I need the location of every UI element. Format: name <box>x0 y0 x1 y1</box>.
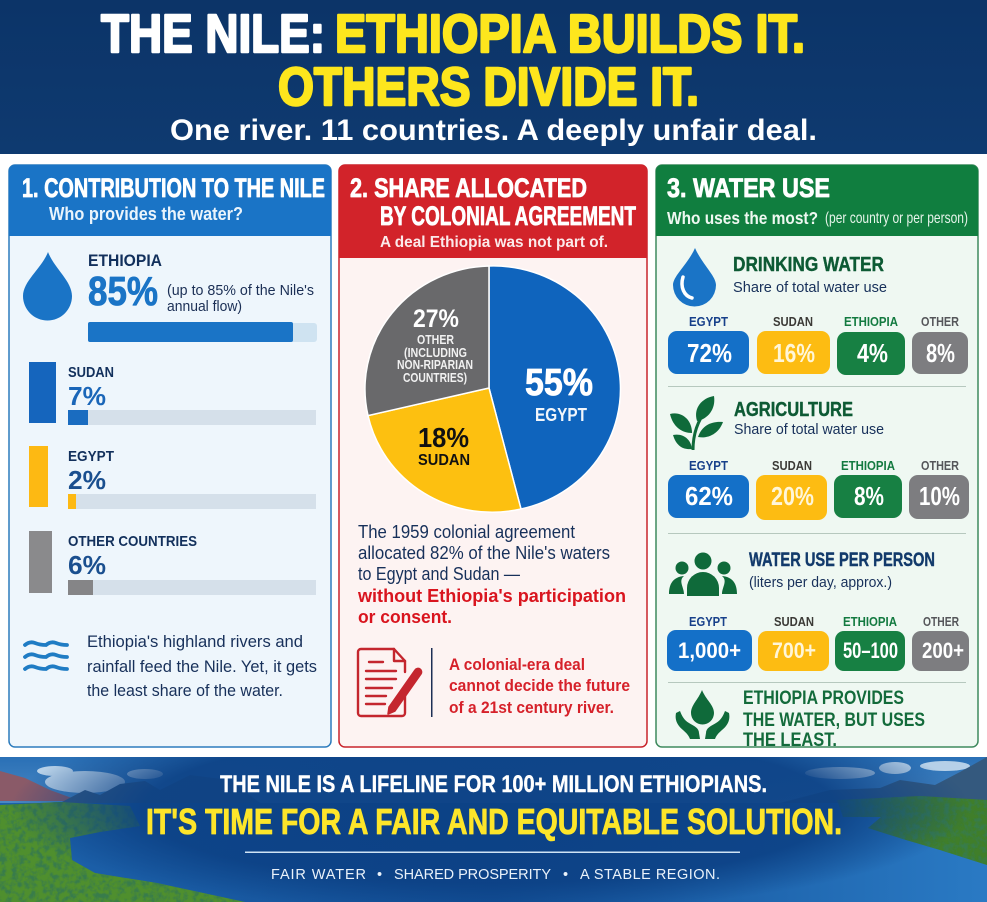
agreement text: or consent. <box>358 607 452 627</box>
icon: water drop <box>23 252 72 320</box>
drinking water values: 72% <box>687 338 732 368</box>
drinking water values: SUDAN <box>773 314 813 329</box>
panel 1: contribution to the Nile <box>9 165 331 747</box>
section: agriculture <box>668 396 969 520</box>
panel 1 note: Ethiopia's highland rivers and <box>87 632 303 651</box>
per person values: SUDAN <box>774 614 814 629</box>
Egypt contribution: 2% <box>68 465 106 495</box>
icon: people <box>669 552 737 596</box>
per person values: ETHIOPIA <box>843 614 898 629</box>
panel 3 header: 3. WATER USE <box>667 173 830 203</box>
pie labels: NON-RIPARIAN <box>397 358 473 372</box>
section: agriculture: Share of total water use <box>734 421 884 438</box>
icon: document and pen <box>358 649 422 716</box>
left river bank <box>0 802 245 902</box>
bottom banner: river landscape <box>0 757 987 902</box>
section: drinking water: DRINKING WATER <box>733 254 884 276</box>
agriculture values: ETHIOPIA <box>841 458 896 473</box>
right river bank <box>837 796 987 865</box>
pie labels: COUNTRIES) <box>403 371 467 385</box>
takeaway text <box>743 688 925 751</box>
panel 1 note: the least share of the water. <box>87 681 283 700</box>
agreement text <box>357 522 626 627</box>
pie labels: EGYPT <box>535 405 587 425</box>
pie chart <box>365 266 620 512</box>
per person values: 1,000+ <box>678 638 741 663</box>
banner tagline <box>271 867 720 883</box>
pie labels: 27% <box>413 305 459 333</box>
agriculture values: 8% <box>854 481 884 511</box>
agriculture values: SUDAN <box>772 458 812 473</box>
Ethiopia contribution: annual flow) <box>167 299 242 315</box>
agreement text: The 1959 colonial agreement <box>358 522 575 542</box>
landscape scene <box>0 757 987 902</box>
title line 2: OTHERS DIVIDE IT. <box>278 57 699 117</box>
agriculture values <box>668 458 969 520</box>
per person values: 700+ <box>772 638 816 663</box>
Ethiopia contribution <box>88 251 317 342</box>
panel 1 note <box>87 632 317 700</box>
other countries contribution: 6% <box>68 550 106 580</box>
drinking water values: EGYPT <box>689 314 728 329</box>
per person values: OTHER <box>923 614 959 629</box>
section: drinking water <box>668 248 968 375</box>
panel 2 header <box>339 165 647 258</box>
icon: plant <box>670 396 723 450</box>
banner tagline: • <box>377 867 382 883</box>
subtitle: One river. 11 countries. A deeply unfair deal. <box>170 114 817 147</box>
banner tagline: • <box>563 867 568 883</box>
pie labels: SUDAN <box>418 452 470 469</box>
panel 2 header: BY COLONIAL AGREEMENT <box>380 201 636 231</box>
section: drinking water: Share of total water use <box>733 279 887 296</box>
per person values: EGYPT <box>689 614 727 629</box>
drinking water values <box>668 314 968 375</box>
takeaway text: ETHIOPIA PROVIDES <box>743 688 904 709</box>
drinking water values: 16% <box>773 338 815 368</box>
section: water use per person: (liters per day, approx.) <box>749 574 892 591</box>
panel 1 note: rainfall feed the Nile. Yet, it gets <box>87 657 317 676</box>
agriculture values: EGYPT <box>689 458 728 473</box>
divider line <box>431 648 432 717</box>
icon: water drop with highlight <box>673 248 716 306</box>
icon: water waves <box>25 642 67 669</box>
Ethiopia contribution: ETHIOPIA <box>88 251 162 270</box>
other countries contribution: OTHER COUNTRIES <box>68 533 197 550</box>
section: water use per person <box>667 550 969 671</box>
section: agriculture: AGRICULTURE <box>734 399 853 421</box>
pie labels: 55% <box>525 362 593 404</box>
drinking water values: 4% <box>857 338 888 368</box>
panel 1 header <box>9 165 331 236</box>
takeaway text: THE WATER, BUT USES <box>743 710 925 731</box>
colonial-era callout: A colonial-era deal <box>449 656 585 674</box>
per person values: 50–100 <box>843 638 898 663</box>
panel 2 header: 2. SHARE ALLOCATED <box>350 173 587 203</box>
banner tagline: SHARED PROSPERITY <box>394 867 551 883</box>
drinking water values: OTHER <box>921 314 960 329</box>
agriculture values: OTHER <box>921 458 960 473</box>
Egypt contribution: EGYPT <box>68 448 114 465</box>
panel 3 header: Who uses the most? <box>667 208 818 228</box>
per person values <box>667 614 969 671</box>
Sudan contribution: 7% <box>68 381 106 411</box>
header banner <box>0 0 987 154</box>
agriculture values: 10% <box>919 481 960 511</box>
slice: other 27% <box>365 266 489 416</box>
banner tagline: FAIR WATER <box>271 867 366 883</box>
Sudan contribution: SUDAN <box>68 364 114 381</box>
pie labels: 18% <box>418 422 469 453</box>
slice: Egypt 55% <box>489 266 620 509</box>
Sudan contribution <box>29 362 316 425</box>
takeaway text: THE LEAST. <box>743 730 837 751</box>
section: water use per person: WATER USE PER PERSON <box>749 550 935 571</box>
panel 3 header <box>656 165 978 236</box>
colonial-era callout <box>449 656 630 717</box>
drinking water values: ETHIOPIA <box>844 314 899 329</box>
banner tagline: A STABLE REGION. <box>580 867 720 883</box>
slice: Sudan 18% <box>368 388 521 512</box>
icon: hands holding water drop <box>676 690 729 739</box>
Ethiopia contribution: 85% <box>88 268 158 314</box>
per person values: 200+ <box>922 638 964 663</box>
colonial-era callout: of a 21st century river. <box>449 699 614 717</box>
agreement text: to Egypt and Sudan — <box>358 564 520 584</box>
title line 1: ETHIOPIA BUILDS IT. <box>335 4 805 64</box>
pie labels <box>397 305 593 469</box>
Ethiopia contribution: (up to 85% of the Nile's <box>167 283 314 299</box>
other countries contribution <box>29 531 316 595</box>
banner line 1: THE NILE IS A LIFELINE FOR 100+ MILLION ETHIOPIANS. <box>220 771 767 798</box>
title line 1: THE NILE: <box>101 4 325 64</box>
agriculture values: 20% <box>771 481 814 511</box>
Egypt contribution <box>29 446 316 509</box>
pie labels: (INCLUDING <box>404 346 467 360</box>
title line 1 <box>101 4 805 64</box>
pie labels: OTHER <box>417 333 454 347</box>
panel 2 header: A deal Ethiopia was not part of. <box>380 234 608 251</box>
panel 3: water use <box>656 165 978 751</box>
agreement text: allocated 82% of the Nile's waters <box>358 543 610 563</box>
panel 2: share allocated by colonial agreement <box>339 165 647 747</box>
colonial-era callout: cannot decide the future <box>449 677 630 695</box>
panel 1 header: 1. CONTRIBUTION TO THE NILE <box>22 173 325 203</box>
panel 1 header: Who provides the water? <box>49 204 243 224</box>
agriculture values: 62% <box>685 481 733 511</box>
drinking water values: 8% <box>926 338 955 368</box>
agreement text: without Ethiopia's participation <box>357 586 626 606</box>
